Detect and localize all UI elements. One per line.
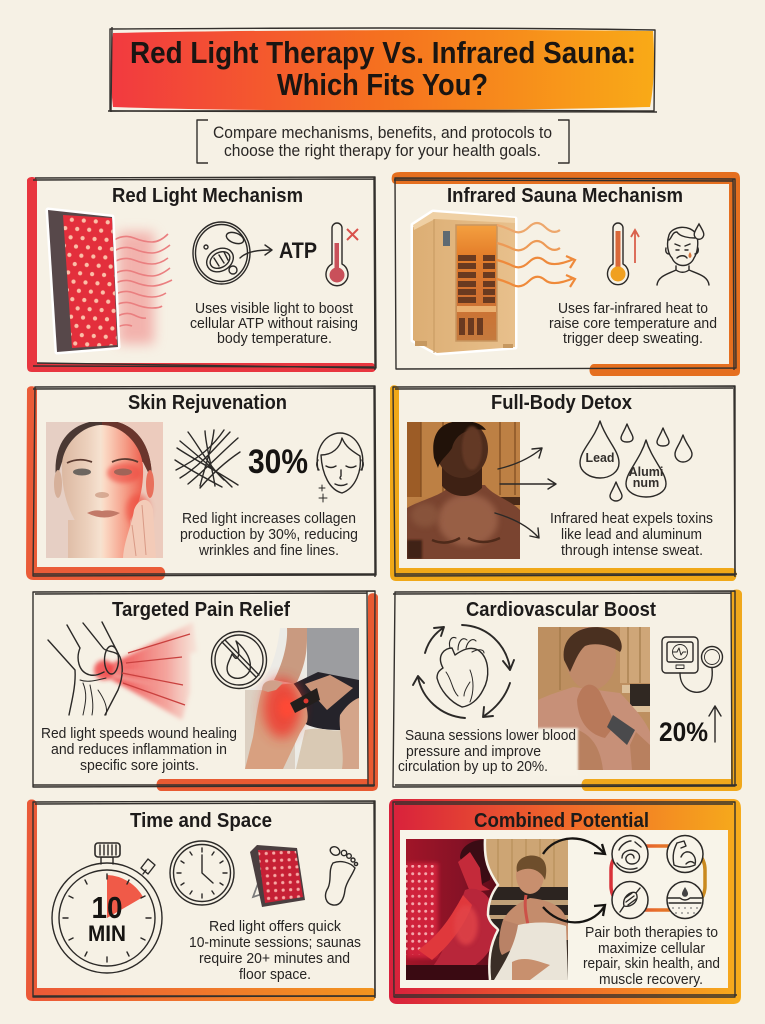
photo: man sweating in sauna [407,420,520,559]
panel: full-body detox [390,385,737,581]
description: Pair both therapies to [585,924,718,941]
description: Red light speeds wound healing [41,725,237,742]
label: lead: Lead [586,450,615,465]
description: maximize cellular [598,940,705,957]
description: and reduces inflammation in [51,741,227,758]
panel: infrared sauna mechanism [392,172,740,376]
description: raise core temperature and [549,315,717,332]
icon: collagen fibers [175,430,240,488]
subtitle with brackets: choose the right therapy for your health goals. [224,141,541,160]
title banner [108,27,657,112]
label: aluminum [629,465,663,490]
icon: muscle fibers [612,882,648,918]
icon: thermometer steady with cross [326,223,358,286]
icon: knee with red rays [48,622,197,720]
icon: sauna cabin [413,212,515,353]
panel: red light mechanism [27,177,376,372]
icon: blood pressure monitor [662,637,722,692]
subtitle with brackets: Compare mechanisms, benefits, and protocols to [213,123,552,142]
description [583,924,720,988]
description: Uses far-infrared heat to [558,300,708,317]
curved arrows to benefit icons [543,838,605,922]
icon: stopwatch with 10 minutes [52,843,162,973]
label: aluminum: Alumi [629,465,663,479]
statistic 30%: 30% [248,443,308,481]
icon: cell with mitochondrion and arrow to ATP [193,222,272,284]
description [41,725,237,774]
waves of infrared heat [497,223,575,287]
description [550,510,713,559]
heading: Full-Body Detox [491,391,633,414]
title banner: Which Fits You? [277,67,488,102]
statistic 20% with arrow [659,706,721,747]
description [180,510,358,559]
description: Red light offers quick [209,918,341,935]
description: Sauna sessions lower blood [405,727,576,744]
ATP label: ATP [279,238,317,263]
heading: Infrared Sauna Mechanism [447,184,683,207]
icon: footprint [326,845,358,905]
photo: face half lit by red light [46,420,163,558]
description: body temperature. [217,330,332,347]
panel: targeted pain relief [33,591,378,791]
panel: time and space [26,800,376,1001]
description: like lead and aluminum [561,526,702,543]
description: specific sore joints. [80,757,199,774]
arrows from body to toxins [495,448,556,538]
description: muscle recovery. [599,971,703,988]
benefit ring with four icons [611,836,705,918]
panel: combined potential [389,799,741,1004]
panel: skin rejuvenation [26,386,376,580]
description: through intense sweat. [561,542,703,559]
icon: sweating face [657,224,709,285]
heading: Time and Space [130,809,272,832]
icon: wall clock [170,841,234,905]
description: production by 30%, reducing [180,526,358,543]
description: Uses visible light to boost [195,300,354,317]
icon: skin layer [667,882,703,918]
panel: cardiovascular boost [393,590,742,791]
description [398,727,576,775]
description [549,300,717,347]
description: wrinkles and fine lines. [198,542,339,559]
icon: no inflammation symbol [212,632,266,688]
description [190,300,358,347]
waves of red light [114,232,172,344]
icon: stopwatch with 10 minutes: MIN [88,921,126,946]
photo: man checking blood pressure [538,626,650,770]
label: aluminum: num [633,476,659,490]
description: pressure and improve [406,743,541,760]
faded text backing [533,728,578,776]
subtitle with brackets [197,120,569,163]
icon: muscle [667,836,703,872]
description: Red light increases collagen [182,510,356,527]
heading: Cardiovascular Boost [466,598,656,621]
description: floor space. [239,966,311,983]
icon: toxin droplets [580,421,692,501]
icon: small red light device [250,845,305,907]
icon: stopwatch with 10 minutes: 10 [92,890,122,925]
statistic 20% with arrow: 20% [659,717,708,747]
description: repair, skin health, and [583,955,720,972]
icon: rising thermometer [608,223,639,285]
icon: cell repair [612,836,648,872]
description: circulation by up to 20%. [398,758,548,775]
heading: Skin Rejuvenation [128,391,287,414]
photo: red light device on knee [245,628,359,769]
icon: heart with circulation arrows [413,625,514,718]
description: 10-minute sessions; saunas [189,934,361,951]
photo: red light and sauna split scene [406,839,568,980]
heading: Red Light Mechanism [112,184,303,207]
description: trigger deep sweating. [563,330,703,347]
icon: red light panel device [48,210,118,352]
description: cellular ATP without raising [190,315,358,332]
heading: Targeted Pain Relief [112,598,290,621]
icon: serene face with sparkles [317,433,363,502]
title banner: Red Light Therapy Vs. Infrared Sauna: [130,35,636,70]
description: Infrared heat expels toxins [550,510,713,527]
description: require 20+ minutes and [199,950,350,967]
heading: Combined Potential [474,809,649,832]
description [189,918,361,983]
